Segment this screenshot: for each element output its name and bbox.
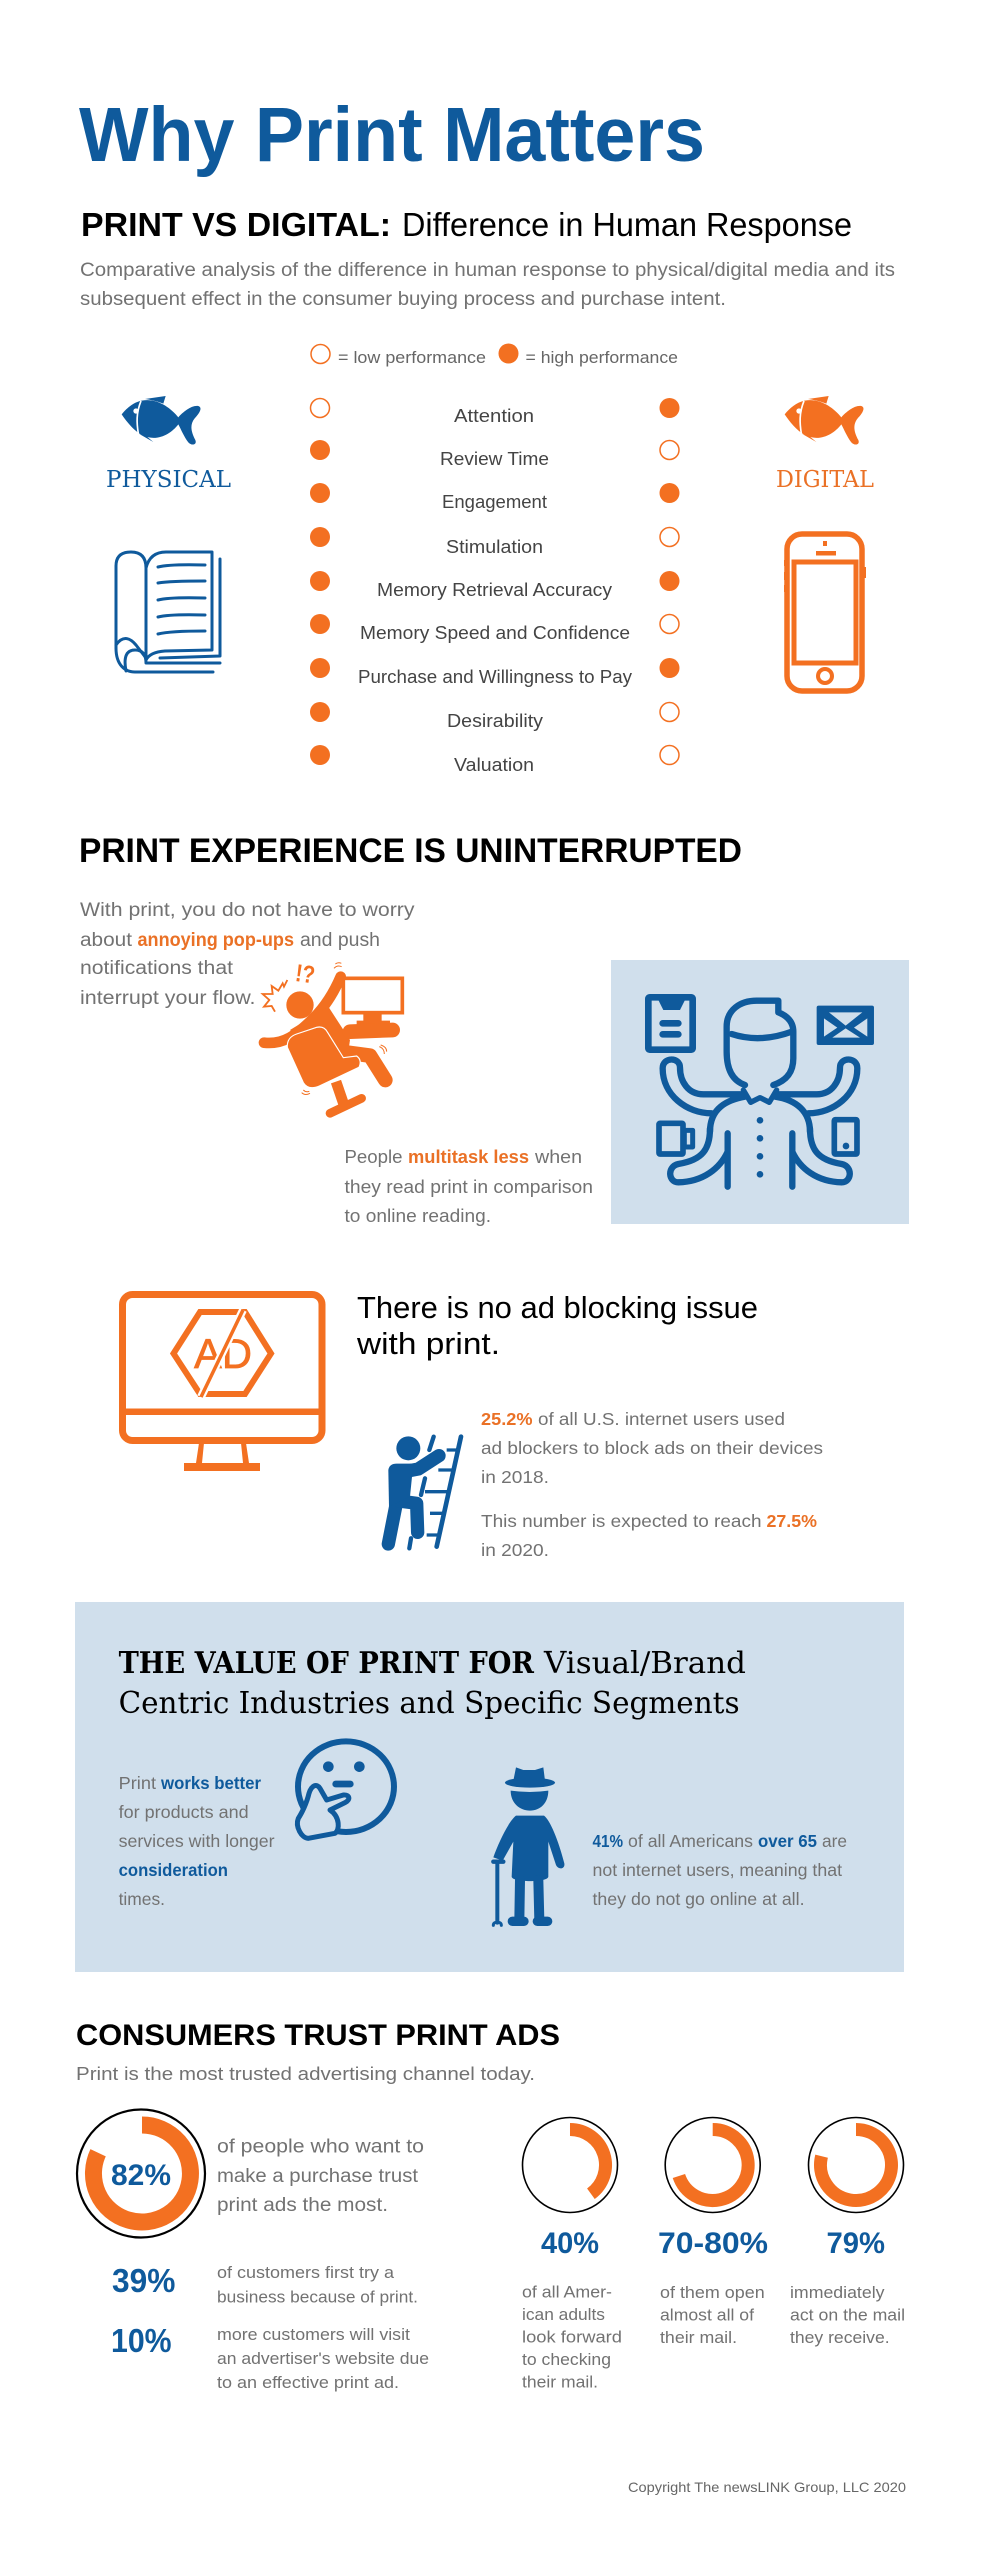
column: 40% (522, 2118, 622, 2392)
text: works better: works better (160, 1773, 261, 1793)
description (790, 2283, 905, 2347)
text: ad blocker statistics: This number is expected to reach (481, 1511, 762, 1531)
legend: = high performance (526, 349, 678, 367)
icon: elderly man with cane (493, 1767, 564, 1925)
section: consumers trust print ads (76, 2019, 905, 2392)
heading (81, 206, 852, 243)
description: look forward (522, 2328, 622, 2346)
text: 10% description: an advertiser's website due (217, 2349, 429, 2368)
criteria labels: Memory Speed and Confidence (360, 623, 630, 643)
icon: smartphone (784, 534, 866, 691)
text: pop-ups: notifications that (80, 958, 234, 979)
heading: THE VALUE OF PRINT FOR (119, 1645, 534, 1680)
comparison table (310, 398, 680, 775)
text: ad blocker statistics (481, 1409, 823, 1560)
heading: Centric Industries and Specific Segments (119, 1686, 740, 1720)
text: over 65: 41% (592, 1831, 623, 1851)
text: ad blocker statistics: in 2020. (481, 1540, 549, 1560)
column: 79% (790, 2118, 905, 2347)
section: print vs digital (80, 206, 895, 775)
icon: physical fish (122, 396, 200, 445)
panel: multitasking (611, 960, 909, 1224)
icon: monitor with blocked ad: AD (194, 1330, 252, 1377)
icon: panicked office worker: !? (294, 960, 317, 989)
criteria labels: Purchase and Willingness to Pay (358, 667, 632, 687)
value: 79% (826, 2227, 885, 2260)
text: pop-ups: annoying pop-ups (138, 930, 294, 951)
text: pop-ups: about (80, 930, 133, 951)
text: multitask: People (344, 1147, 402, 1167)
panel: value of print (75, 1602, 904, 1972)
text: 10% description: more customers will visit (217, 2325, 410, 2344)
text: ad blocker statistics: of all U.S. internet users used (538, 1409, 785, 1429)
text: 39% description: of customers first try a (217, 2263, 395, 2282)
text: multitask: to online reading. (344, 1206, 491, 1226)
intro text (80, 260, 895, 310)
heading: Visual/Brand (543, 1646, 746, 1680)
text: 82% description: print ads the most. (217, 2195, 388, 2216)
text: 82% description: of people who want to (217, 2136, 424, 2158)
text: 39% description: business because of print. (217, 2288, 418, 2306)
description: their mail. (660, 2328, 737, 2347)
icon: book (116, 552, 220, 672)
text: ad blocker statistics: 27.5% (766, 1511, 817, 1531)
text: works better: consideration (119, 1860, 228, 1880)
criteria labels (358, 406, 632, 775)
description: of them open (660, 2283, 765, 2302)
description: act on the mail (790, 2306, 905, 2325)
heading (356, 1290, 758, 1361)
title: Why Print Matters (79, 92, 705, 178)
criteria labels: Stimulation (446, 537, 543, 557)
criteria labels: Valuation (454, 755, 534, 775)
donut: 79% (808, 2118, 904, 2212)
text: ad blocker statistics: 25.2% (481, 1409, 533, 1429)
description: ican adults (522, 2305, 605, 2324)
criteria labels: Desirability (447, 711, 543, 731)
legend: = low performance (338, 349, 486, 367)
icon: multitasking person (648, 997, 874, 1187)
section: ad blocking (122, 1290, 823, 1560)
text: ad blocker statistics: ad blockers to block ads on their devices (481, 1438, 823, 1458)
heading: PRINT EXPERIENCE IS UNINTERRUPTED (79, 832, 742, 870)
text: multitask: they read print in comparison (344, 1177, 593, 1197)
section: uninterrupted (79, 832, 909, 1226)
criteria labels: Attention (454, 406, 534, 426)
text: ad blocker statistics: in 2018. (481, 1467, 549, 1487)
text: pop-ups: and push (300, 930, 380, 951)
description (660, 2283, 765, 2347)
icon: monitor with blocked ad (122, 1294, 322, 1471)
text: multitask (344, 1147, 593, 1226)
legend (311, 344, 678, 367)
text: 39% description (217, 2263, 418, 2306)
text: pop-ups: With print, you do not have to worry (80, 900, 415, 921)
text: 82% description: make a purchase trust (217, 2166, 419, 2187)
criteria labels: Engagement (442, 492, 547, 512)
description: to checking (522, 2350, 611, 2369)
heading: with print. (356, 1326, 500, 1361)
heading: Difference in Human Response (402, 206, 852, 243)
description: they receive. (790, 2328, 890, 2347)
label: digital: DIGITAL (776, 467, 874, 493)
text: works better: services with longer (119, 1831, 275, 1851)
heading: PRINT VS DIGITAL: (81, 206, 391, 243)
text: over 65: are (822, 1831, 847, 1851)
text: works better: for products and (119, 1802, 249, 1822)
stat: 39%: 39% (112, 2262, 175, 2299)
text: 10% description: to an effective print ad. (217, 2373, 399, 2392)
description (522, 2282, 622, 2392)
text: over 65: they do not go online at all. (592, 1889, 804, 1909)
criteria labels: Review Time (440, 449, 549, 469)
column: 70-80% (658, 2118, 768, 2347)
value: 70-80% (658, 2227, 768, 2260)
heading: CONSUMERS TRUST PRINT ADS (76, 2019, 560, 2052)
criteria labels: Memory Retrieval Accuracy (377, 580, 612, 600)
donut: 70-80% (665, 2118, 760, 2212)
heading: There is no ad blocking issue (357, 1290, 758, 1325)
description: their mail. (522, 2372, 598, 2392)
description: of all Amer- (522, 2282, 612, 2302)
copyright: Copyright The newsLINK Group, LLC 2020 (628, 2479, 906, 2495)
icon: person climbing ladder (388, 1436, 461, 1548)
subheading: Print is the most trusted advertising channel today. (76, 2064, 535, 2084)
text: 82% description (217, 2136, 424, 2216)
digital ratings (660, 398, 680, 764)
text: works better: Print (119, 1773, 156, 1793)
text: over 65: not internet users, meaning that (592, 1860, 842, 1880)
text: over 65: of all Americans (628, 1831, 753, 1851)
icon: digital fish (785, 396, 863, 445)
description: immediately (790, 2283, 885, 2302)
donut: 82%: 82% (111, 2159, 171, 2192)
icon: panicked office worker (263, 960, 402, 1113)
icon: thinking face (297, 1741, 394, 1838)
text: over 65 (592, 1831, 847, 1909)
label: physical: PHYSICAL (106, 467, 231, 493)
text: multitask: multitask less (408, 1147, 529, 1167)
intro text: Comparative analysis of the difference in human response to physical/digital media and its (80, 260, 895, 281)
intro text: subsequent effect in the consumer buying process and purchase intent. (80, 289, 726, 310)
stat: 10%: 10% (111, 2322, 172, 2359)
text: over 65: over 65 (758, 1831, 817, 1851)
donut: 82% (77, 2110, 205, 2238)
value: 40% (541, 2227, 599, 2260)
text: pop-ups (80, 900, 415, 1009)
text: works better: times. (119, 1889, 165, 1909)
text: works better (119, 1773, 275, 1909)
text: 10% description (217, 2325, 429, 2392)
description: almost all of (660, 2306, 754, 2325)
heading (119, 1645, 746, 1720)
text: multitask: when (534, 1147, 582, 1167)
text: pop-ups: interrupt your flow. (80, 988, 256, 1009)
physical ratings (310, 398, 330, 765)
donut: 40% (522, 2118, 618, 2212)
